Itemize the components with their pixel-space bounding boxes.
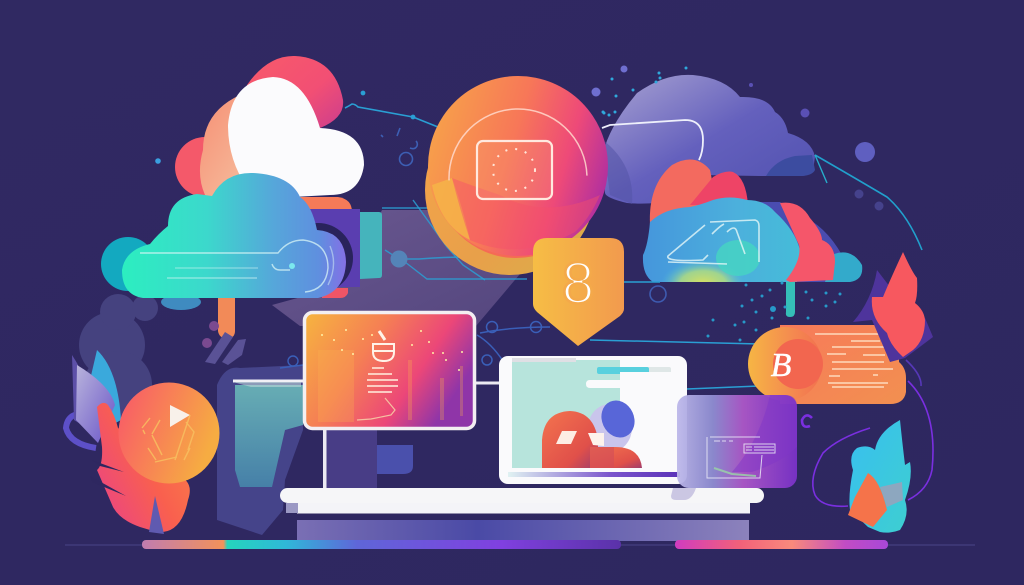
backdrop: translucent diagonal panel — [272, 210, 525, 326]
panel: orange pill card — [748, 325, 906, 404]
red bottom — [322, 288, 348, 298]
play circle — [118, 382, 220, 484]
panel: monitor — [304, 312, 474, 428]
monitor chart arrow — [357, 398, 395, 420]
bar: gradient timeline left — [142, 540, 621, 549]
decorative circles near stem — [202, 321, 219, 348]
monitor stem — [323, 429, 326, 489]
play triangle — [170, 405, 190, 427]
circuit lines middle — [382, 200, 534, 280]
purple block — [302, 209, 360, 287]
purple back — [760, 202, 842, 282]
panel: left leaves and play circle — [66, 350, 220, 534]
card lower shadow — [671, 488, 696, 500]
connector lines top-left — [345, 91, 438, 127]
person head blue — [595, 395, 641, 443]
panel: purple card — [671, 395, 797, 500]
left loops — [280, 356, 303, 368]
person red — [542, 411, 598, 468]
red back cloud — [247, 56, 343, 140]
purple outline curl — [66, 414, 96, 448]
pill text lines — [815, 334, 893, 387]
front circle — [428, 76, 608, 256]
white speech shape — [586, 380, 687, 388]
dark ring — [283, 223, 353, 293]
panel: laptop — [499, 356, 687, 484]
backdrop: dark blue panel behind monitor — [217, 365, 303, 535]
scattered dots left — [155, 158, 161, 164]
baseline rule — [65, 544, 975, 546]
panel: dark purple cloud — [602, 75, 815, 204]
cloud group: left layered clouds — [101, 56, 382, 339]
dots under right cloud — [708, 283, 840, 340]
white route line — [602, 120, 703, 160]
laptop mint screen — [512, 360, 620, 468]
dark leaf — [72, 355, 98, 435]
red right shape — [780, 203, 835, 282]
person body — [590, 447, 642, 468]
backdrop: stand block — [326, 430, 413, 488]
red left bump — [175, 137, 235, 197]
connector: monitor to laptop — [476, 382, 500, 384]
right curve line — [815, 155, 922, 250]
lavender leaf — [76, 365, 115, 443]
yellow and teal glows — [666, 240, 760, 282]
teal front cloud — [122, 173, 346, 298]
white cloud — [228, 77, 364, 197]
connector line right of badge — [590, 282, 760, 389]
connector: loops right of monitor — [477, 322, 550, 365]
middle red layer — [436, 98, 596, 258]
badge numeral: 8 — [562, 251, 594, 316]
red flame — [97, 403, 190, 532]
base band — [297, 520, 749, 541]
icon frame — [477, 141, 552, 199]
monitor icon — [373, 331, 394, 361]
red top shape — [650, 160, 714, 225]
monitor city bars — [318, 350, 463, 422]
lower left warm overlay — [432, 178, 470, 240]
short line — [815, 155, 827, 183]
drip — [786, 282, 795, 317]
inner arc — [447, 107, 587, 180]
lower red overlay — [452, 178, 600, 249]
monitor text lines — [367, 368, 398, 392]
bar: gradient timeline right — [675, 540, 888, 549]
sketched icon — [142, 415, 194, 462]
cloud arc and lines — [140, 240, 334, 292]
panel: right multi-coloured cloud — [643, 160, 862, 317]
backdrop: left dark blob — [79, 294, 158, 419]
dots around purple cloud — [596, 68, 879, 206]
panel: base — [280, 488, 764, 541]
person halo — [588, 404, 632, 452]
icon: right blue flame — [848, 420, 911, 533]
teal bump — [101, 237, 155, 291]
main body — [643, 198, 800, 282]
panel: centre orange circle — [425, 76, 608, 275]
back circle — [425, 105, 595, 275]
backdrop: teal glass panel — [235, 385, 303, 487]
peach cloud — [200, 95, 270, 205]
monitor sparkle dots — [322, 330, 462, 370]
bitcoin style letter: B — [771, 347, 792, 384]
stem — [218, 296, 235, 339]
teal end — [825, 252, 862, 282]
card chart — [707, 437, 775, 478]
base top — [280, 488, 764, 503]
small circuit glyphs — [381, 128, 417, 166]
spike — [149, 496, 164, 534]
connector: white bar left of monitor — [233, 381, 304, 387]
soft leaves under stem — [205, 332, 246, 365]
white tag — [556, 431, 577, 444]
purple connector curves — [802, 360, 933, 506]
teal block — [360, 212, 382, 279]
laptop lower bar — [508, 472, 680, 477]
icon: right red flame — [853, 252, 933, 362]
connector: ring under cloud — [650, 286, 666, 302]
blue leaf — [90, 350, 121, 425]
progress bar — [597, 367, 671, 374]
icon sparkle ring — [493, 149, 535, 191]
base shelf — [297, 498, 750, 514]
red under block — [300, 197, 352, 218]
circuit node — [390, 250, 408, 268]
white line icon — [668, 220, 759, 264]
panel: price badge — [533, 238, 624, 346]
